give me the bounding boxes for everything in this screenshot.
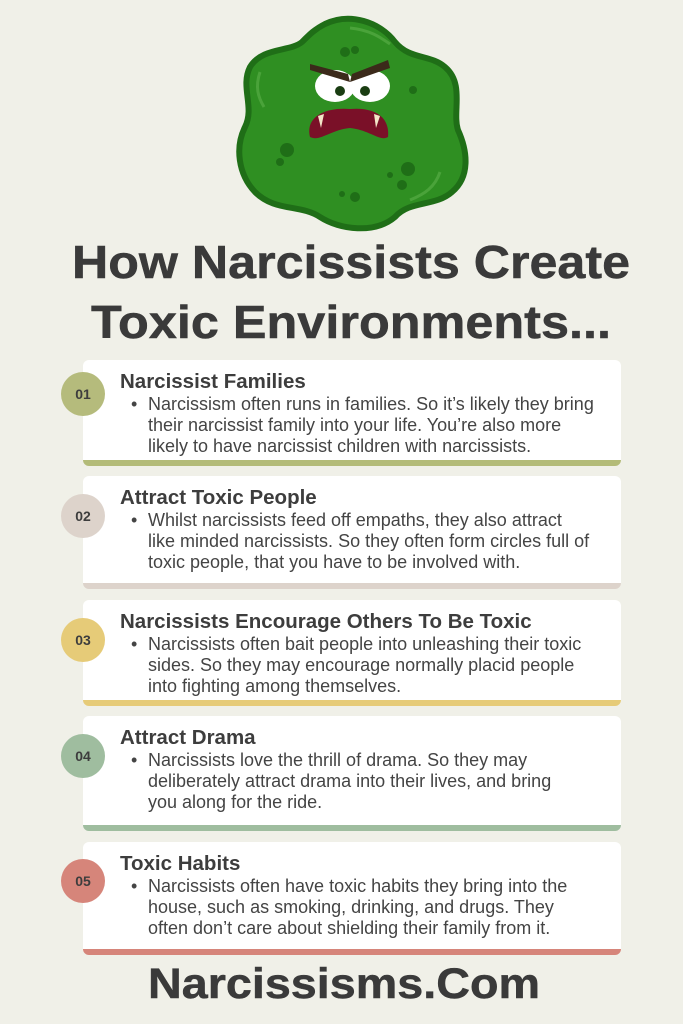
text <box>120 750 616 813</box>
icon: green toxic blob monster <box>236 16 469 232</box>
text: often don’t care about shielding their family from it. <box>148 918 550 938</box>
heading: Narcissists Encourage Others To Be Toxic <box>120 610 532 633</box>
text: Whilst narcissists feed off empaths, they also attract <box>148 510 562 530</box>
number badge 02: 02 <box>75 508 91 524</box>
number badge 05 <box>61 859 105 903</box>
text: their narcissist family into your life. You’re also more <box>148 415 561 435</box>
number badge 01 <box>61 372 105 416</box>
text: you along for the ride. <box>148 792 322 812</box>
heading: Attract Drama <box>120 726 256 749</box>
text: likely to have narcissist children with narcissists. <box>148 436 531 456</box>
number badge 04: 04 <box>75 748 91 764</box>
text: Narcissists love the thrill of drama. So they may <box>148 750 527 770</box>
heading: Narcissist Families <box>120 370 306 393</box>
text: toxic people, that you have to be involved with. <box>148 552 520 572</box>
number badge 03 <box>61 618 105 662</box>
eyes <box>310 60 390 102</box>
text: Narcissists often bait people into unleashing their toxic <box>148 634 581 654</box>
number badge 05: 05 <box>75 873 91 889</box>
panel: card 4 <box>83 716 621 831</box>
text: like minded narcissists. So they often form circles full of <box>148 531 589 551</box>
text <box>120 394 616 457</box>
panel: card 5 <box>83 842 621 955</box>
panel: card 3 <box>83 600 621 706</box>
number badge 03: 03 <box>75 632 91 648</box>
number badge 04 <box>61 734 105 778</box>
heading: Attract Toxic People <box>120 486 317 509</box>
text <box>120 634 616 697</box>
panel: card 2 <box>83 476 621 589</box>
heading: Toxic Habits <box>120 852 240 875</box>
text <box>120 876 616 939</box>
text <box>120 510 616 573</box>
number badge 02 <box>61 494 105 538</box>
title <box>72 236 630 348</box>
number badge 01: 01 <box>75 386 91 402</box>
text: Narcissists often have toxic habits they bring into the <box>148 876 567 896</box>
title: How Narcissists Create <box>72 236 630 288</box>
text: sides. So they may encourage normally placid people <box>148 655 574 675</box>
text: Narcissism often runs in families. So it’s likely they bring <box>148 394 594 414</box>
text: into fighting among themselves. <box>148 676 401 696</box>
title: Toxic Environments... <box>91 296 611 348</box>
text: deliberately attract drama into their lives, and bring <box>148 771 551 791</box>
panel: card 1 <box>83 360 621 466</box>
text: house, such as smoking, drinking, and drugs. They <box>148 897 554 917</box>
mouth <box>309 109 388 138</box>
footer: site name: Narcissisms.Com <box>148 960 540 1008</box>
